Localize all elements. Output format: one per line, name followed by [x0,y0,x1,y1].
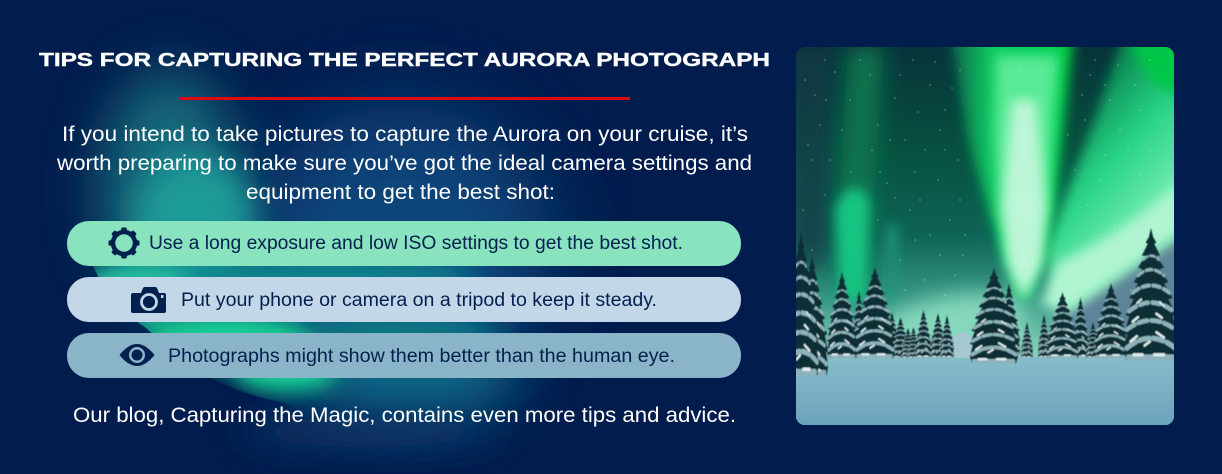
stars [803,60,1160,295]
aurora: left faint bands [835,47,1025,358]
tip: long exposure [67,221,741,266]
snowy mound [943,332,975,358]
aurora: right band [1040,40,1185,316]
icon: gear [108,228,140,258]
ground snow [796,357,1174,425]
tip: human eye [67,333,741,378]
dusk sky corner [1068,236,1174,340]
icon: eye [120,344,154,366]
intro text: equipment to get the best shot: [246,181,555,204]
tip: tripod [67,277,741,322]
red divider [180,97,630,100]
tip: human eye: Photographs might show them better than the human eye. [168,346,675,367]
aurora: main band [950,30,1075,305]
fir trees [783,228,1178,375]
icon: camera [131,287,166,313]
closing text: Our blog, Capturing the Magic, contains even more tips and advice. [73,404,736,427]
photo: aurora over snowy forest [796,47,1174,425]
intro text [56,123,752,204]
background with aurora glow [68,44,578,462]
tip: tripod: Put your phone or camera on a tripod to keep it steady. [181,290,657,311]
title: TIPS FOR CAPTURING THE PERFECT AURORA PHOTOGRAPH [39,49,770,70]
intro text: worth preparing to make sure you’ve got the ideal camera settings and [56,152,752,175]
tip: long exposure: Use a long exposure and low ISO settings to get the best shot. [149,233,683,254]
intro text: If you intend to take pictures to capture the Aurora on your cruise, it’s [62,123,748,146]
